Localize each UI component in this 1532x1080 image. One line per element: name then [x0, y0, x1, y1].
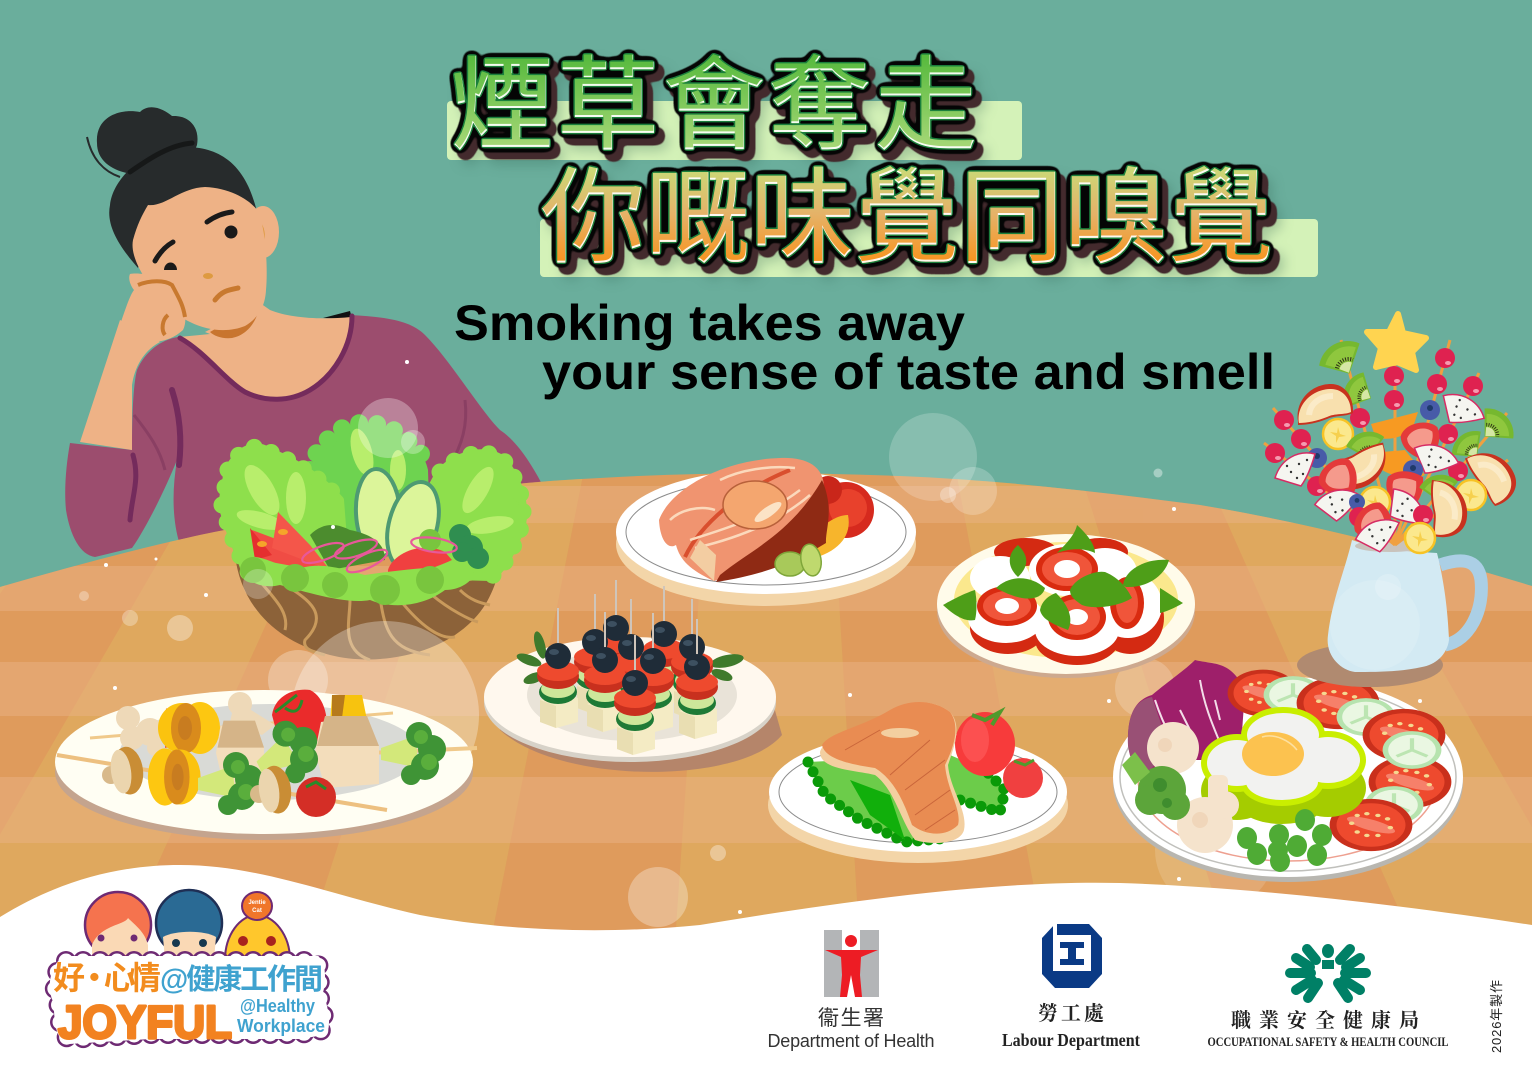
logo: Department of Health — [768, 930, 934, 1051]
logo: Occupational Safety and Health Council — [1208, 944, 1449, 1049]
logo: Occupational Safety and Health Council: 職業安全健康局 — [1231, 1004, 1427, 1033]
title highlight bars — [447, 101, 1318, 277]
table with plaid cloth — [0, 474, 1532, 930]
mascot: cat — [225, 892, 290, 960]
bottom white wave — [0, 865, 1532, 1080]
logo: Labour Department — [1002, 924, 1140, 1050]
subtitle: English heading: Smoking takes away — [454, 295, 965, 351]
mascot: girl — [85, 892, 151, 958]
sparkle dots — [104, 360, 1422, 914]
woman resting head on hand — [65, 107, 545, 557]
mascot: cat: Cat — [252, 908, 262, 914]
logo: Occupational Safety and Health Council: OCCUPATIONAL SAFETY & HEALTH COUNCIL — [1208, 1034, 1449, 1049]
plate: grilled vegetable skewers — [55, 690, 477, 840]
plate: caprese salad — [937, 525, 1195, 678]
logo: Joyful @ Healthy Workplace: @健康工作間 — [160, 963, 323, 996]
logo: Labour Department: 勞工處 — [1038, 997, 1104, 1026]
bubbles over jug — [1330, 574, 1420, 670]
salad bowl — [222, 423, 523, 660]
mascot: boy — [156, 890, 222, 960]
plate: egg, tomato and vegetable salad — [1113, 660, 1463, 882]
logo: Joyful @ Healthy Workplace — [53, 890, 325, 1048]
title: Chinese heading: 煙草會奪走 — [451, 49, 977, 163]
title: Chinese heading — [451, 49, 1273, 277]
subtitle: English heading: your sense of taste and smell — [542, 344, 1275, 400]
mascot: cat: Jentie — [248, 900, 266, 906]
subtitle: English heading — [454, 295, 1275, 400]
logo: Joyful @ Healthy Workplace: JOYFUL — [58, 996, 232, 1048]
logo: Joyful @ Healthy Workplace: Workplace — [237, 1016, 325, 1036]
logo: Department of Health: 衞生署 — [818, 1002, 884, 1032]
production year note: 2026年製作 — [1489, 980, 1504, 1053]
logo: Department of Health: Department of Health — [768, 1031, 934, 1051]
scalloped sign outline — [55, 961, 324, 1039]
plate: grilled salmon — [616, 458, 916, 606]
logo: Labour Department: Labour Department — [1002, 1030, 1140, 1050]
bokeh bubbles on table — [79, 398, 1275, 927]
plate: olive canapes — [484, 580, 782, 772]
logo: Joyful @ Healthy Workplace: 好·心情 — [53, 953, 161, 999]
plate: steak with lettuce and tomato — [768, 702, 1068, 863]
title: Chinese heading: 你嘅味覺同嗅覺 — [541, 161, 1273, 277]
logo: Joyful @ Healthy Workplace: @Healthy — [240, 996, 315, 1016]
jug of fruit skewers — [1264, 314, 1522, 687]
